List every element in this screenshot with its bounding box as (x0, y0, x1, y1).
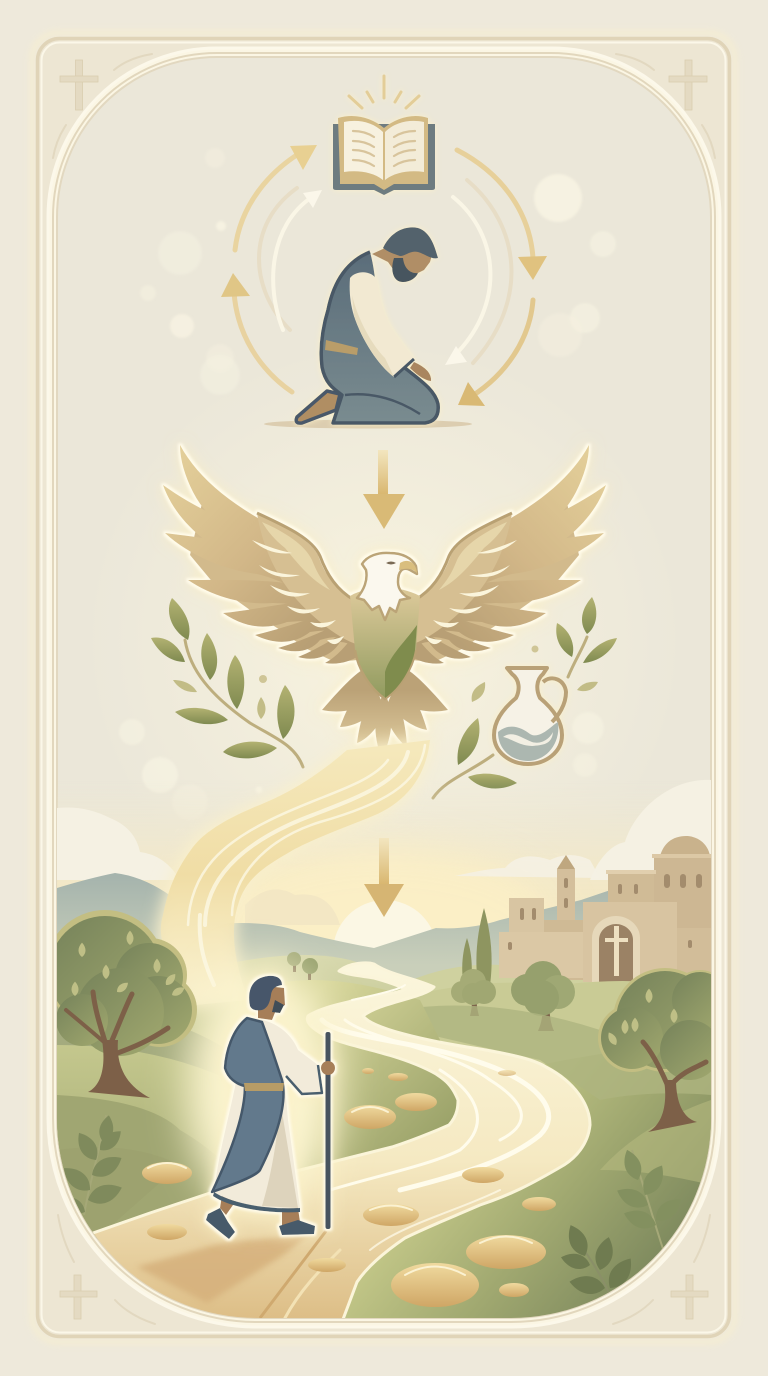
central soft bloom (84, 340, 684, 940)
knee hand (410, 362, 431, 381)
road light ribbons (285, 985, 549, 1318)
beard (272, 1000, 284, 1013)
pages (344, 121, 383, 180)
arm (350, 272, 414, 377)
low left wall (499, 932, 583, 978)
arrow: down to eagle (363, 450, 405, 529)
canopy rim (45, 910, 197, 1047)
main gate block (583, 902, 677, 982)
trunk (643, 1042, 706, 1132)
corner cross: bottom left (60, 1275, 97, 1319)
left hills (57, 1006, 218, 1240)
cover (333, 124, 435, 195)
white robe (214, 1018, 322, 1208)
distant mountains (57, 873, 608, 978)
clouds (57, 780, 711, 925)
canopy rim (598, 968, 730, 1072)
tail feathers (322, 670, 448, 758)
olive branch: lower right (433, 682, 517, 798)
landscape scene (45, 738, 730, 1330)
shadowed road foreground (140, 1236, 306, 1302)
corner cross: top left (60, 60, 98, 110)
large tree: left (45, 910, 197, 1098)
stream light strands (188, 745, 425, 985)
front ankle (282, 1208, 300, 1226)
plant: lower right, tall (614, 1147, 686, 1252)
arrow: down-right from book (457, 150, 547, 280)
sleeve outline (286, 1065, 322, 1094)
eye (386, 562, 396, 564)
arrow: lower right (458, 300, 533, 406)
right wing (409, 445, 606, 664)
plant: lower left (57, 1114, 126, 1218)
small tree: centre right (511, 961, 575, 1031)
staff shadow (260, 1231, 326, 1318)
water (498, 722, 558, 761)
back leg (220, 1195, 240, 1215)
green breast patch (385, 625, 417, 698)
stones (142, 1068, 556, 1307)
building group: walled town (499, 836, 714, 982)
light stream from eagle (157, 738, 432, 1010)
faint arrowheads (303, 190, 467, 365)
arrow: lower left (221, 273, 292, 392)
sky (57, 786, 626, 909)
far hills (190, 955, 590, 1043)
white head and neck (357, 553, 417, 620)
corner cross: bottom right (671, 1275, 708, 1319)
robe (321, 252, 438, 423)
front sandal (279, 1220, 315, 1235)
ground shadow (264, 420, 472, 428)
tiny distant trees (287, 952, 318, 980)
winding road (60, 963, 590, 1330)
hair (383, 227, 438, 258)
sun (334, 901, 432, 948)
olive branch: upper right (532, 597, 617, 691)
olive branch: left (151, 598, 303, 767)
right hill bands (424, 1006, 711, 1182)
mid field between man and road (308, 981, 456, 1160)
neck and face (258, 985, 285, 1020)
cross on door (605, 926, 628, 976)
right lower wall (677, 936, 711, 973)
trunk (66, 992, 168, 1098)
figure: walking man with staff (206, 976, 335, 1239)
rear block (608, 874, 654, 902)
canopy (601, 971, 728, 1080)
belt (325, 340, 358, 355)
hem (213, 1192, 300, 1212)
staff (326, 1032, 330, 1229)
rays (349, 76, 419, 108)
blue mantle (212, 1018, 283, 1192)
text lines (353, 131, 415, 166)
foreground right hill (415, 981, 711, 1129)
left wing (163, 445, 360, 664)
glow behind walking man (187, 965, 337, 1215)
corner flourishes (53, 54, 715, 1324)
stone top highlights (148, 1107, 532, 1275)
canopy (49, 916, 192, 1056)
plant: lower right, short (559, 1222, 638, 1297)
dome (660, 836, 710, 854)
left block (509, 898, 544, 932)
leaves (169, 598, 190, 640)
small tree: centre (451, 969, 496, 1016)
icon: open book with rays (333, 76, 435, 195)
fold (345, 394, 420, 414)
faint inner arcs (259, 180, 511, 363)
beard (392, 258, 418, 282)
sun glow (292, 864, 508, 932)
upper right block (654, 858, 711, 928)
back foot (296, 391, 340, 423)
windows (508, 874, 702, 950)
arrow: up-right to book (235, 145, 317, 250)
back foot (206, 1208, 235, 1239)
neck and face (372, 245, 432, 276)
corner cross: top right (669, 60, 707, 110)
belt (244, 1083, 284, 1091)
right foreground ground (345, 1064, 711, 1318)
icon: glass water jug (494, 668, 566, 764)
figure: kneeling man in prayer (264, 227, 472, 428)
robe shading (262, 1100, 298, 1208)
tower (557, 855, 575, 869)
large tree: right (598, 968, 730, 1132)
cypress trees (462, 908, 492, 985)
hand (321, 1061, 335, 1075)
leaf highlights (71, 931, 186, 998)
body shield (350, 588, 420, 699)
eagle with spread wings (163, 445, 606, 758)
leaf highlights (606, 989, 678, 1047)
hair (249, 976, 282, 1010)
handle (543, 678, 566, 722)
bokeh lights (119, 148, 616, 820)
arrow: down to path (364, 838, 404, 917)
inner panel (57, 57, 711, 1318)
beak (399, 561, 417, 573)
arched door (592, 916, 640, 982)
cycle arrows around kneeling figure (221, 145, 547, 406)
